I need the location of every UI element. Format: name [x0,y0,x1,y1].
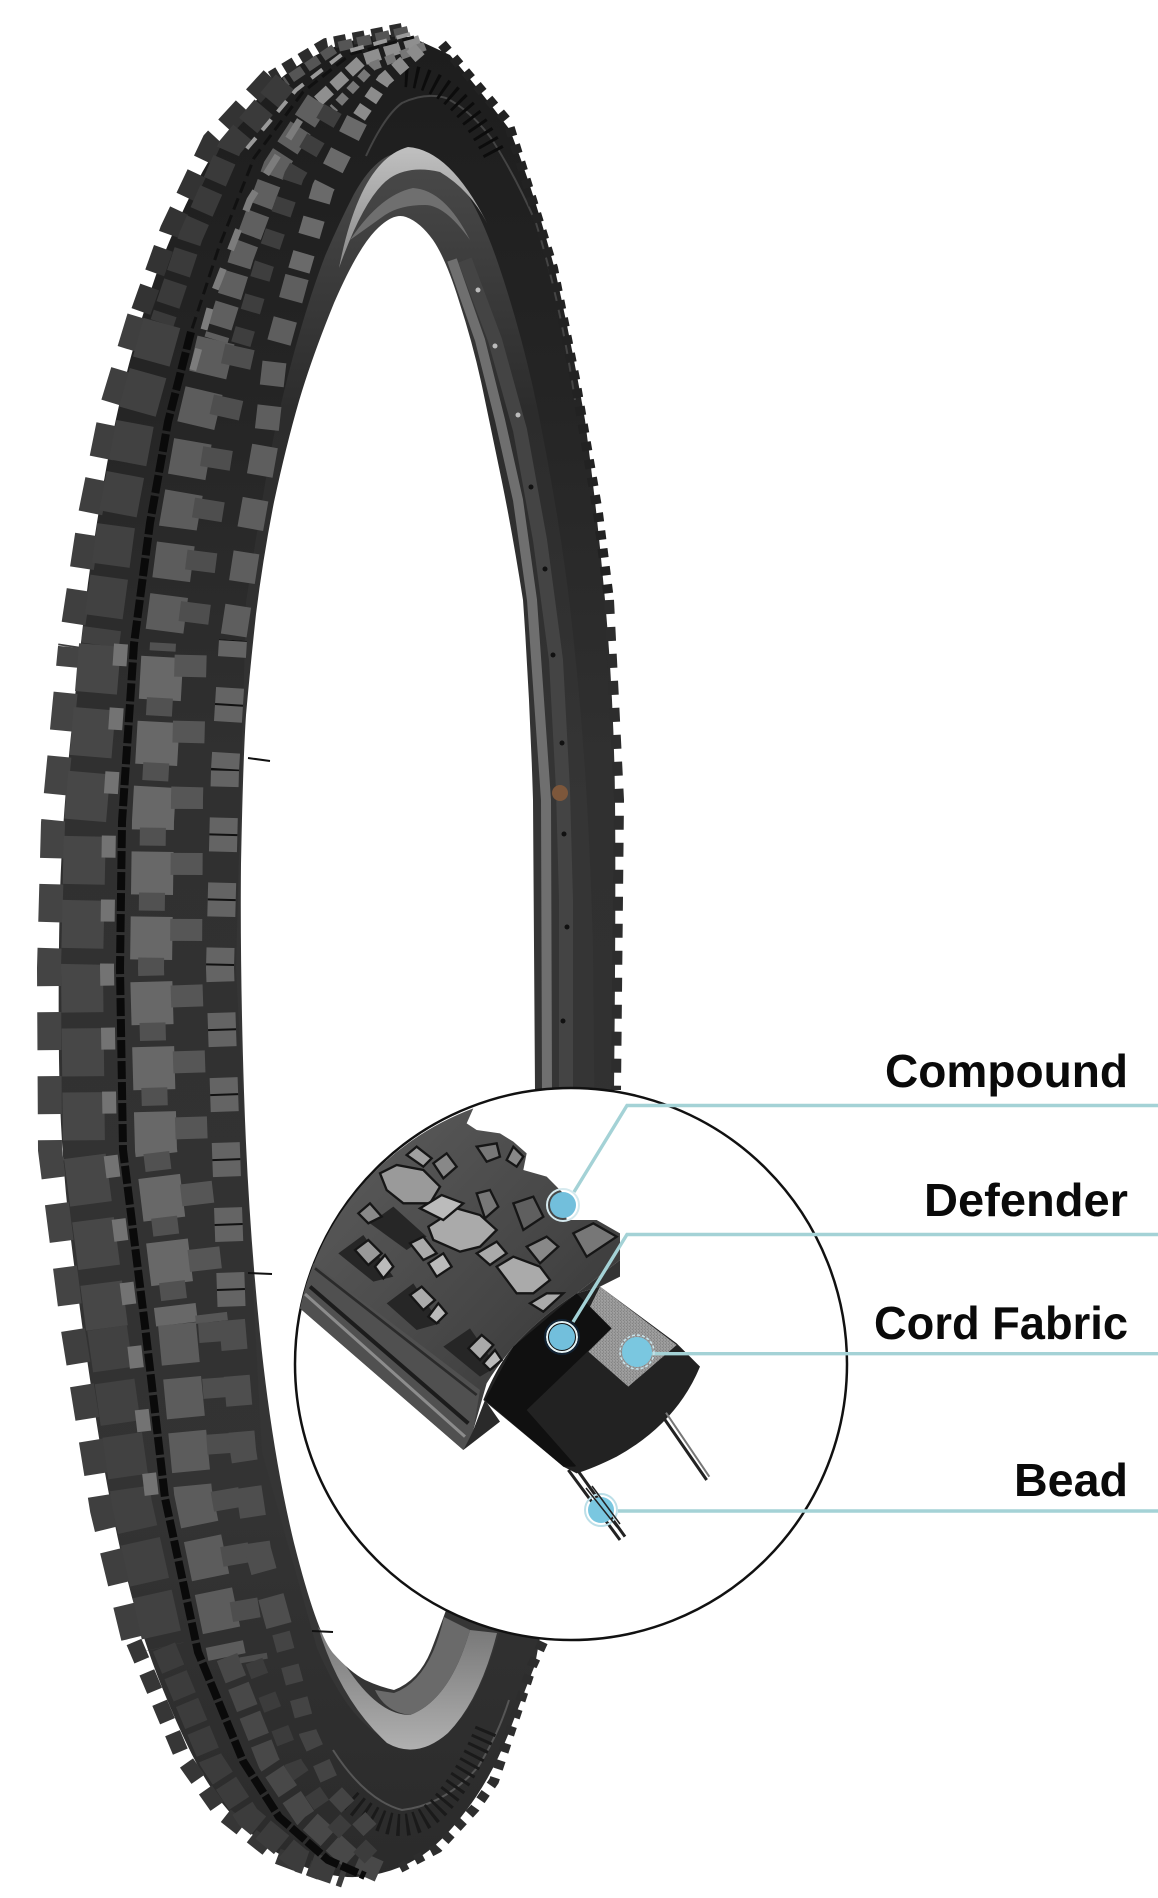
tread section [300,1108,620,1450]
cord fabric patch [588,1287,677,1387]
callout: Defender [545,1174,1158,1354]
callout: Compound [547,1045,1158,1221]
bead wires [568,1415,707,1540]
rim spoke holes [476,288,570,1024]
tread lugs [355,1143,617,1370]
valve [552,785,568,801]
sidewall ring lines and ribs [333,76,575,1825]
callout: Cord Fabric: Cord Fabric [874,1297,1128,1349]
rim band [236,147,596,1750]
side knobs [220,49,420,1830]
tire cross section [300,1108,709,1540]
tire body silhouette [59,35,615,1877]
callout: Bead: Bead [1014,1454,1128,1506]
tire photo [49,29,619,1877]
callout: Cord Fabric [620,1297,1158,1369]
bead edge ridges [300,1263,480,1450]
centre panels [151,41,420,1874]
top tread highlights [244,34,410,152]
callout: Bead [585,1454,1158,1527]
light bits beside groove [107,644,152,1498]
casing layers [483,1287,700,1473]
magnifier circle [295,1088,847,1640]
outer knobs [49,29,402,1872]
rim light strip and centre band [452,260,566,1090]
side knob divider lines [220,640,233,1320]
lug shadows [338,1207,497,1377]
centre groove [120,37,414,1876]
callout: Compound: Compound [885,1045,1128,1097]
tread rows [49,29,425,1876]
small lugs between panels [151,643,177,1324]
sidewall teeth right [400,44,619,1868]
hole through the wheel [241,216,560,1690]
callout: Defender: Defender [924,1174,1128,1226]
shoulder lugs [186,46,425,1858]
tick marks [248,758,333,1632]
outer blocks [82,31,408,1876]
